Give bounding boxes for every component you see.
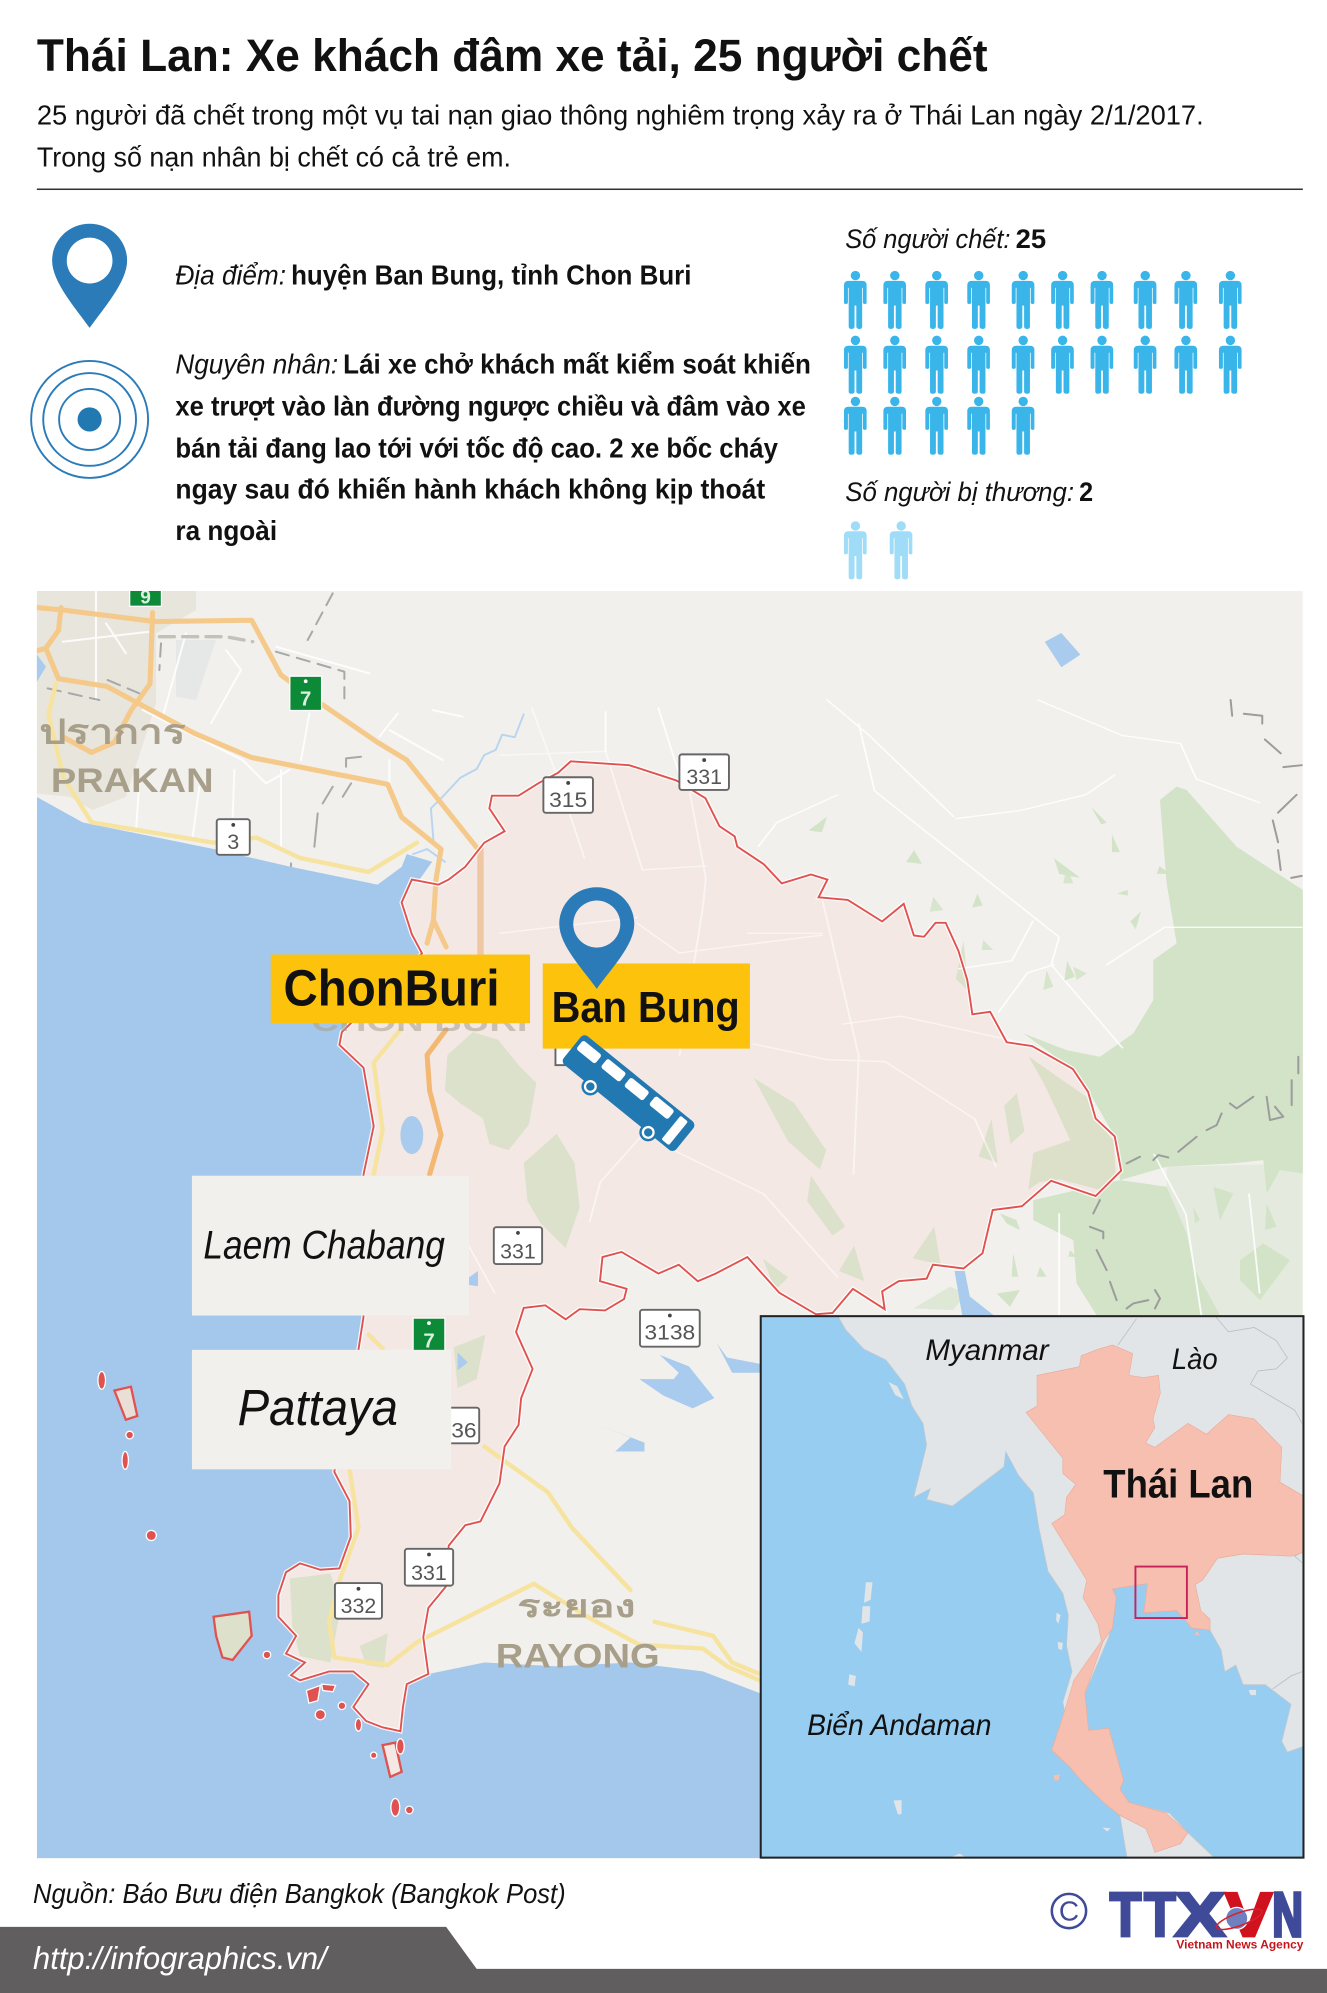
highway shields: 331	[411, 1560, 447, 1585]
province forest patches	[290, 941, 1116, 1668]
highway shields: 9	[140, 588, 151, 609]
footer bar: http://infographics.vn/	[33, 1940, 330, 1976]
minor roads	[468, 700, 1302, 1317]
label: Pattaya	[192, 1350, 451, 1469]
map labels: ปราการ	[39, 714, 186, 752]
highway shields	[130, 578, 729, 1619]
highway shields: 3138	[644, 1320, 695, 1345]
footer bar	[0, 1927, 1327, 1993]
label: Ban Bung: Ban Bung	[552, 984, 740, 1032]
inset labels: Lào	[1172, 1344, 1218, 1376]
logo: TTXVN: X	[1174, 1881, 1225, 1950]
sea	[37, 797, 763, 1858]
cause text	[175, 349, 811, 546]
label: Laem Chabang: Laem Chabang	[203, 1223, 445, 1267]
inset locator square	[1135, 1567, 1187, 1618]
logo: TTXVN: T	[1110, 1881, 1141, 1950]
inset labels	[807, 1335, 1253, 1742]
inset borders	[1118, 1317, 1302, 1689]
icon: target rings	[31, 361, 148, 478]
logo: TTXVN: Vietnam News Agency	[1176, 1938, 1304, 1952]
pictogram: 25 dead	[844, 271, 1242, 455]
source: Nguồn: Báo Bưu điện Bangkok (Bangkok Post)	[33, 1878, 566, 1909]
logo: TTXVN: N	[1272, 1881, 1303, 1950]
highway shields: 7	[300, 688, 311, 710]
label: Laem Chabang	[192, 1176, 469, 1316]
pictogram: 2 injured	[844, 521, 912, 579]
cause text: ra ngoài	[175, 515, 277, 546]
urban tint	[36, 590, 463, 873]
location text: huyện Ban Bung, tỉnh Chon Buri	[291, 260, 691, 291]
province boundary	[278, 761, 1121, 1731]
injured label: Số người bị thương:	[845, 477, 1074, 507]
location text: Địa điểm:	[175, 260, 286, 291]
highway shields: 315	[549, 787, 587, 812]
map labels: CHON BURI	[311, 1006, 527, 1037]
highway shields: 7	[423, 1330, 435, 1352]
islands	[98, 1371, 413, 1816]
label: Pattaya: Pattaya	[238, 1379, 398, 1436]
highway shields: 331	[500, 1238, 536, 1263]
icon: location pin	[52, 224, 127, 328]
inset labels: Thái Lan	[1103, 1462, 1253, 1506]
highway shields: 331	[686, 764, 722, 789]
highway shields: 3	[227, 829, 239, 854]
map labels: PRAKAN	[51, 762, 214, 800]
logo: TTXVN: V	[1225, 1881, 1273, 1950]
inset Thailand	[1026, 1345, 1306, 1852]
icon: map pin	[559, 887, 634, 989]
cause text: Nguyên nhân:	[175, 349, 338, 380]
map labels: ระยอง	[517, 1588, 636, 1624]
cause text: ngay sau đó khiến hành khách không kịp thoát	[175, 473, 765, 504]
inset islands	[848, 1382, 1256, 1858]
map labels: RAYONG	[496, 1638, 660, 1676]
province fill	[404, 881, 1099, 1194]
cause text: Lái xe chở khách mất kiểm soát khiến	[343, 349, 811, 380]
map: Chon Buri province	[36, 578, 1303, 1858]
forest area	[913, 787, 1303, 1315]
highway shields: 36	[451, 1418, 477, 1443]
label: Ban Bung	[543, 963, 750, 1049]
intro text	[37, 100, 1204, 173]
water features	[400, 633, 1080, 1452]
highway shields: 332	[341, 1593, 376, 1618]
deaths label: Số người chết:	[845, 224, 1010, 254]
logo: TTXVN: C	[1059, 1896, 1079, 1927]
inset land	[838, 1317, 1306, 1859]
map labels	[39, 714, 660, 1676]
intro text: 25 người đã chết trong một vụ tai nạn giao thông nghiêm trọng xảy ra ở Thái Lan ngày 2/1/2017.	[37, 100, 1204, 131]
scattered greens north-east	[809, 807, 1170, 981]
logo: TTXVN: T	[1144, 1881, 1176, 1950]
inset frame	[761, 1316, 1303, 1858]
major roads	[37, 608, 480, 1174]
cause text: bán tải đang lao tới với tốc độ cao. 2 xe bốc cháy	[175, 433, 779, 464]
deaths label: 25	[1016, 224, 1046, 254]
inset map: Thailand locator	[761, 1316, 1306, 1859]
injured label: 2	[1079, 477, 1093, 507]
icon: bus	[562, 1035, 694, 1151]
intro text: Trong số nạn nhân bị chết có cả trẻ em.	[37, 142, 511, 173]
title: Thái Lan: Xe khách đâm xe tải, 25 người chết	[37, 30, 988, 81]
cause text: xe trượt vào làn đường ngược chiều và đâm vào xe	[175, 391, 806, 422]
label: ChonBuri: ChonBuri	[283, 959, 500, 1016]
inset labels: Myanmar	[925, 1335, 1050, 1367]
inset labels: Biển Andaman	[807, 1710, 991, 1742]
grey border dashes	[1090, 700, 1302, 1308]
logo: TTXVN	[1052, 1881, 1304, 1952]
